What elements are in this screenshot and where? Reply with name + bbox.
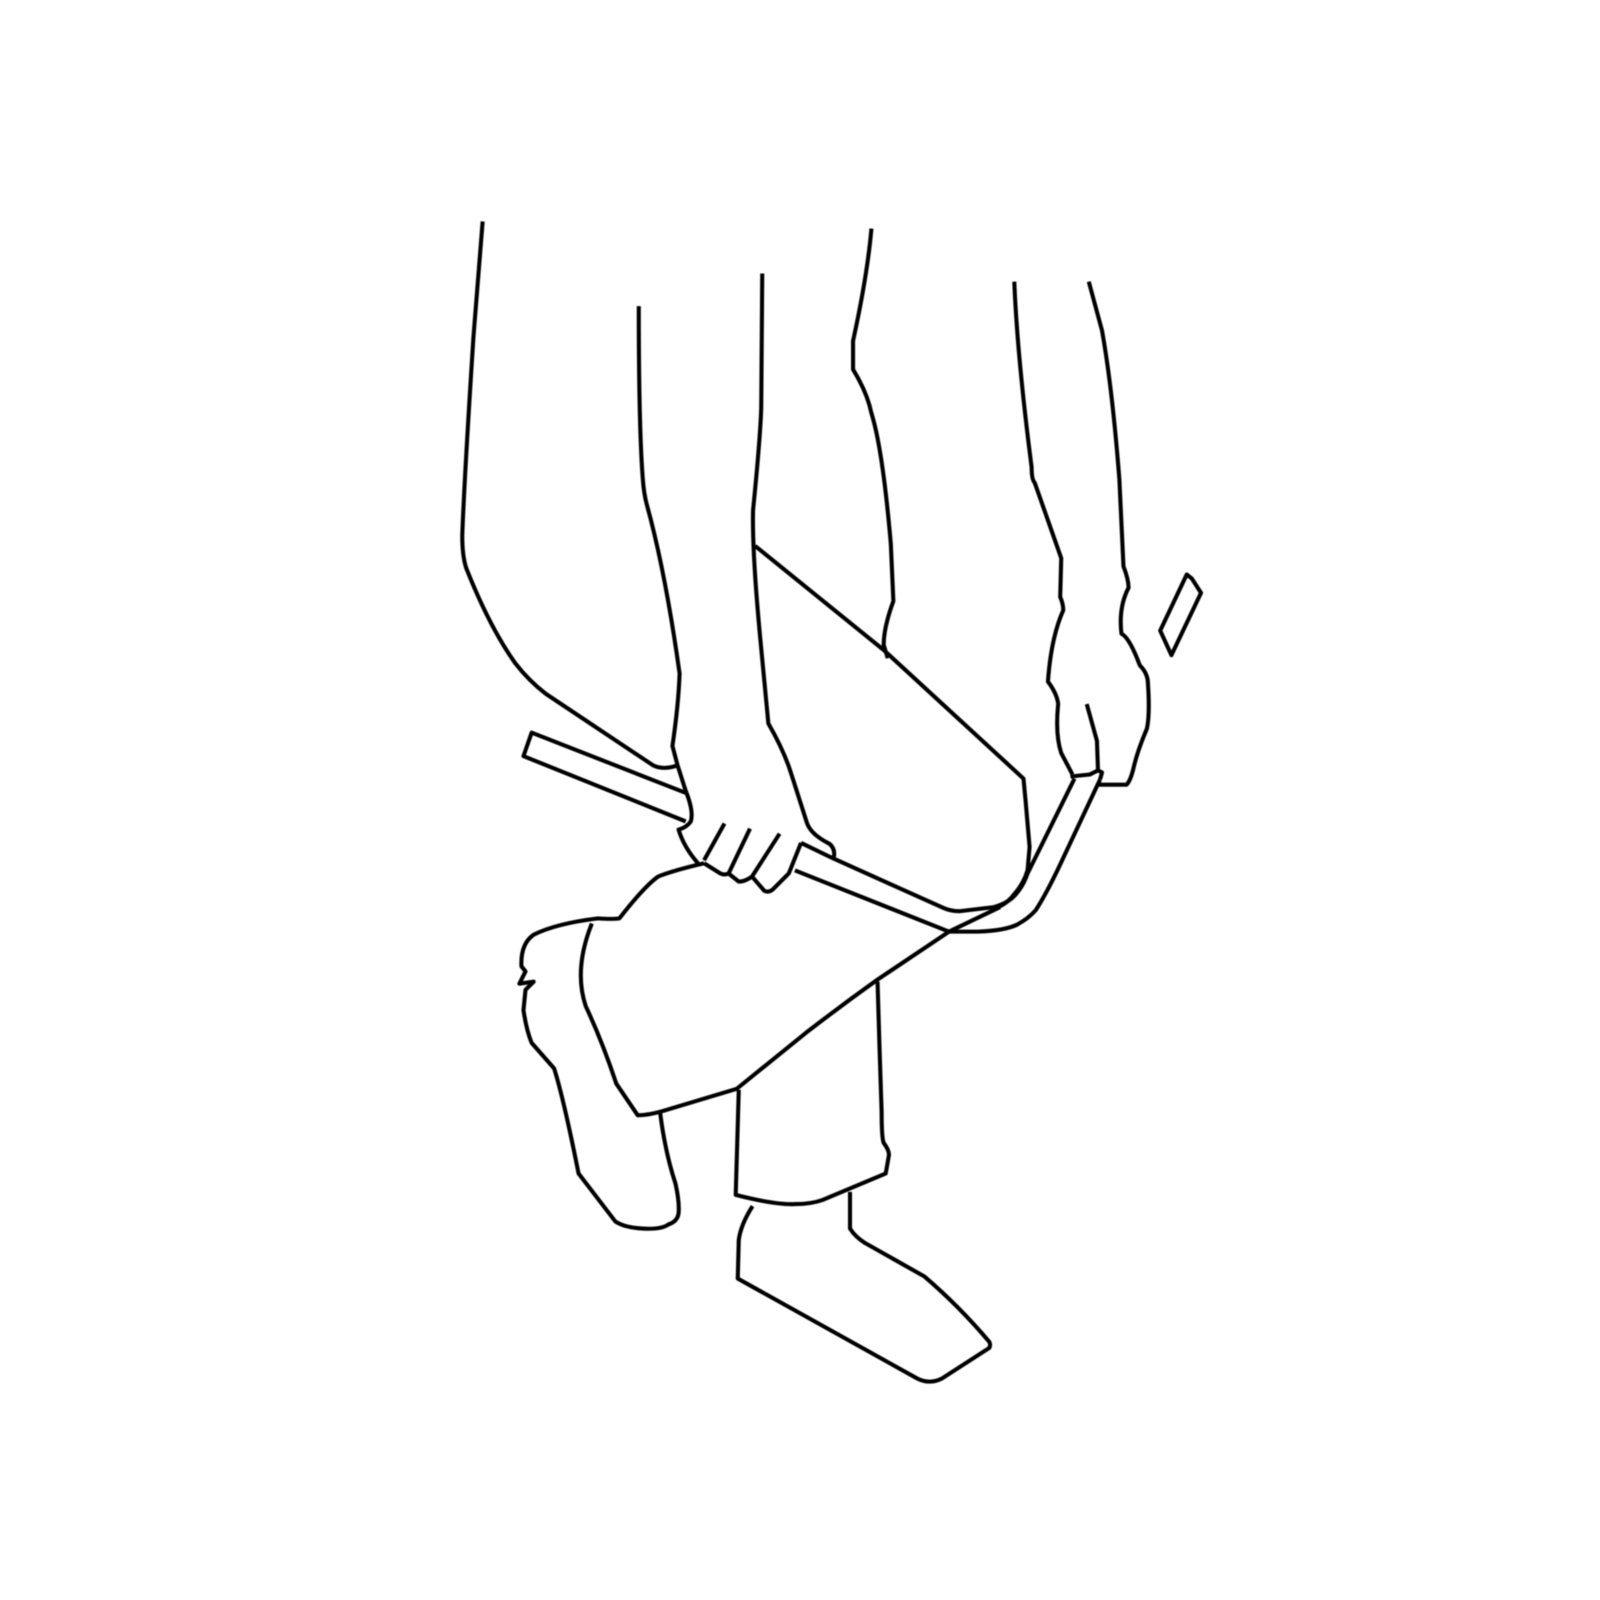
right arm and hand [1014, 282, 1149, 785]
middle arm [853, 229, 893, 658]
seat edge [755, 546, 1030, 907]
strap end fragment [1160, 574, 1201, 655]
right trouser leg [736, 982, 889, 1204]
strap [523, 733, 1102, 932]
torso outline [462, 221, 678, 768]
fingers [704, 823, 801, 892]
figure artwork [462, 221, 1201, 1382]
left arm and hand [639, 273, 834, 892]
thigh and knee [519, 863, 1000, 1229]
right foot [738, 1192, 990, 1382]
